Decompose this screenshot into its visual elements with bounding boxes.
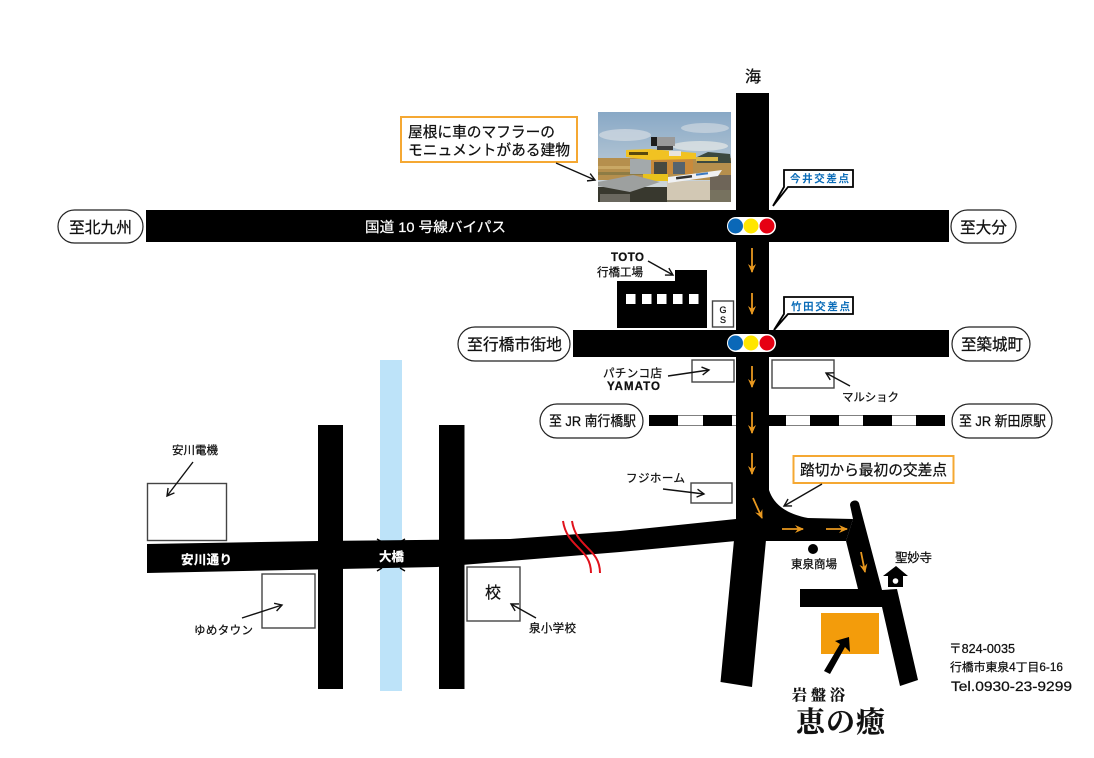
label: Shomyoji temple: 聖妙寺 bbox=[895, 551, 932, 565]
box: gas station: S bbox=[720, 315, 726, 325]
road network: main roads bbox=[146, 93, 949, 687]
direction: to JR Shin-Tabaru: 至 JR 新田原駅 bbox=[959, 413, 1046, 429]
label: Ohashi bridge: 大橋 bbox=[379, 549, 404, 564]
label: TOTO factory: 行橋工場 bbox=[597, 265, 644, 279]
arrow: Yasukawa Electric bbox=[167, 462, 193, 496]
destination: orange building bbox=[821, 613, 879, 654]
label: Yasukawa Electric: 安川電機 bbox=[172, 444, 218, 457]
arrow: Pachinko bbox=[668, 370, 709, 376]
callout: building note: モニュメントがある建物 bbox=[408, 142, 570, 159]
box: Yume Town bbox=[262, 574, 315, 628]
callout: first intersection after crossing bbox=[794, 456, 954, 483]
landmark: Higashiizumi shopping bbox=[791, 544, 838, 571]
traffic light: Imai bbox=[727, 217, 776, 235]
road: Yasukawa street bbox=[147, 519, 736, 573]
landmark: Higashiizumi shopping: 東泉商場 bbox=[791, 557, 838, 571]
label: route 10 bypass: 国道 10 号線バイパス bbox=[365, 219, 506, 235]
arrow: school bbox=[511, 604, 536, 618]
arrow: Marushoku bbox=[826, 373, 850, 386]
box: gas station bbox=[712, 301, 734, 327]
box: Yasukawa Electric bbox=[148, 484, 226, 540]
direction: to Oita: 至大分 bbox=[960, 219, 1007, 237]
direction: to JR Shin-Tabaru bbox=[952, 404, 1052, 438]
bridge notches bbox=[377, 539, 405, 571]
callout: Takeda intersection bbox=[774, 297, 853, 330]
label: TOTO factory: TOTO bbox=[611, 252, 644, 264]
arrow: destination bbox=[824, 637, 850, 674]
callout: Imai intersection bbox=[773, 170, 853, 206]
photo: building with muffler monument bbox=[598, 112, 731, 202]
building: TOTO factory bbox=[617, 270, 707, 328]
address: 行橋市東泉4丁目6-16 bbox=[950, 660, 1063, 674]
label: Fuji Home: フジホーム bbox=[626, 472, 685, 485]
direction: to Kitakyushu bbox=[58, 210, 143, 243]
road: vertical left bbox=[318, 425, 343, 689]
direction: to Kitakyushu: 至北九州 bbox=[69, 219, 132, 237]
river bbox=[380, 360, 402, 691]
address bbox=[949, 641, 1072, 694]
box: Fuji Home bbox=[691, 483, 732, 503]
arrow: Yume Town bbox=[242, 605, 282, 618]
railway bbox=[649, 412, 945, 429]
box: Pachinko Yamato bbox=[692, 360, 734, 382]
address: Tel.0930-23-9299 bbox=[951, 678, 1072, 694]
callout: first intersection after crossing: 踏切から最初の交差点 bbox=[800, 462, 947, 479]
direction: to Oita bbox=[951, 210, 1016, 243]
label: Pachinko Yamato: YAMATO bbox=[607, 381, 660, 393]
callout: building note: 屋根に車のマフラーの bbox=[408, 124, 555, 141]
box: gas station: G bbox=[719, 305, 727, 315]
arrow: TOTO bbox=[648, 261, 673, 275]
label: TOTO factory bbox=[597, 252, 644, 279]
road break mark bbox=[563, 521, 600, 573]
road: vertical right bbox=[439, 425, 464, 689]
callout: Takeda intersection: 竹田交差点 bbox=[791, 300, 850, 313]
icon: temple bbox=[883, 566, 908, 587]
traffic light: Takeda bbox=[727, 334, 776, 352]
direction: to Yukuhashi city: 至行橋市街地 bbox=[467, 336, 562, 354]
box: school: 校 bbox=[485, 584, 501, 602]
direction: to Yukuhashi city bbox=[458, 327, 570, 361]
label: Pachinko Yamato: パチンコ店 bbox=[603, 367, 662, 380]
label: Izumi elementary school: 泉小学校 bbox=[529, 621, 576, 635]
route arrows bbox=[752, 248, 865, 572]
direction: to Tsuiki: 至築城町 bbox=[961, 336, 1023, 354]
arrow: first intersection bbox=[784, 484, 822, 506]
label: facility name bbox=[792, 686, 887, 739]
direction: to JR Minami-Yukuhashi bbox=[540, 404, 643, 438]
arrow: Fuji Home bbox=[663, 489, 704, 494]
box: school bbox=[467, 567, 520, 621]
label: Marushoku: マルショク bbox=[842, 391, 899, 404]
box: Marushoku bbox=[772, 360, 834, 388]
label: Yume Town: ゆめタウン bbox=[194, 624, 253, 637]
label: sea: 海 bbox=[745, 68, 761, 86]
direction: to Tsuiki bbox=[952, 327, 1030, 361]
arrow: callout to photo bbox=[556, 163, 595, 180]
direction: to JR Minami-Yukuhashi: 至 JR 南行橋駅 bbox=[549, 413, 636, 429]
callout: Imai intersection: 今井交差点 bbox=[790, 172, 850, 185]
label: Yasukawa street: 安川通り bbox=[181, 552, 232, 567]
label: facility name: 恵の癒 bbox=[796, 706, 887, 739]
address: 〒824-0035 bbox=[949, 641, 1015, 656]
label: facility name: 岩盤浴 bbox=[792, 686, 846, 704]
label: Pachinko Yamato bbox=[603, 367, 662, 393]
callout: building note bbox=[401, 117, 577, 162]
